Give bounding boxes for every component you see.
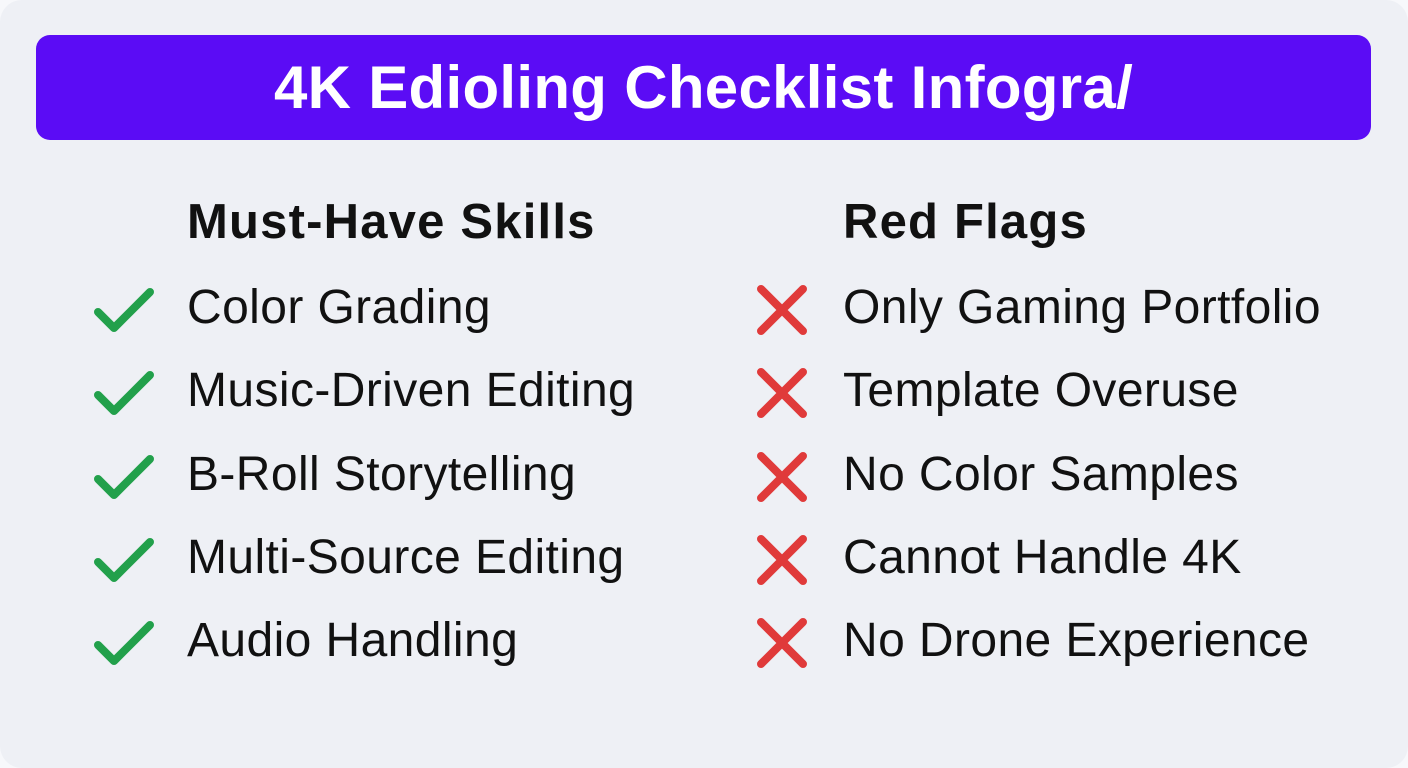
item: Music-Driven Editing: Music-Driven Editing <box>187 364 635 417</box>
list: red flags <box>757 281 1321 668</box>
icon: check 1 <box>94 288 154 332</box>
icon: check 2 <box>94 371 154 415</box>
icon: cross 3 <box>757 452 807 502</box>
item: B-Roll Storytelling: B-Roll Storytelling <box>187 448 576 501</box>
icon: check 5 <box>94 621 154 665</box>
item: No Color Samples: No Color Samples <box>843 448 1239 501</box>
title <box>36 35 1371 140</box>
heading: red flags: Red Flags <box>843 195 1088 249</box>
icon: cross 5 <box>757 618 807 668</box>
item: No Drone Experience: No Drone Experience <box>843 614 1310 667</box>
icon: cross 4 <box>757 535 807 585</box>
item: Audio Handling: Audio Handling <box>187 614 518 667</box>
icon: cross 1 <box>757 285 807 335</box>
icon: check 3 <box>94 455 154 499</box>
icon: cross 2 <box>757 368 807 418</box>
item: Multi-Source Editing: Multi-Source Editing <box>187 531 625 584</box>
item: Template Overuse: Template Overuse <box>843 364 1239 417</box>
heading: must-have skills: Must-Have Skills <box>187 195 596 249</box>
item: Color Grading: Color Grading <box>187 281 491 334</box>
item: Cannot Handle 4K: Cannot Handle 4K <box>843 531 1242 584</box>
item: Only Gaming Portfolio: Only Gaming Portfolio <box>843 281 1321 334</box>
title: 4K Edioling Checklist Infogra/ <box>274 54 1133 121</box>
icon: check 4 <box>94 538 154 582</box>
list: must-have skills <box>94 281 635 667</box>
